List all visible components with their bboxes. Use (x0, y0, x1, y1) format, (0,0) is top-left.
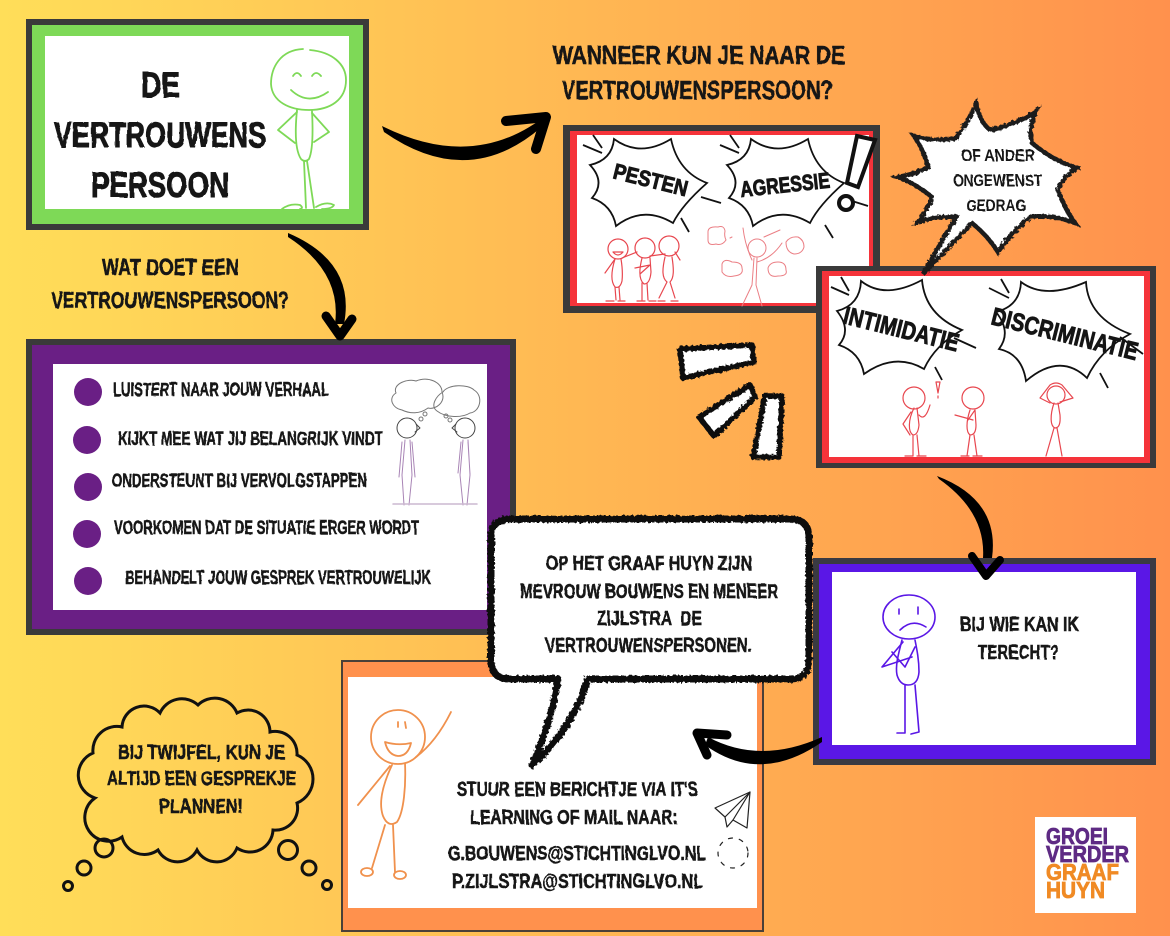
contact text: P.ZIJLSTRA@STICHTINGLVO.NL (452, 871, 703, 893)
logo: Groei Verder Graaf Huyn: GRAAF (1046, 859, 1119, 885)
burst: discriminatie (989, 279, 1143, 388)
icon: exclamation mark (839, 136, 875, 210)
title text: DE (141, 66, 180, 105)
list text: LUISTERT NAAR JOUW VERHAAL (113, 380, 329, 401)
panel: contact details (341, 660, 764, 932)
list text: KIJKT MEE WAT JIJ BELANGRIJK VINDT (118, 429, 383, 450)
list text: VOORKOMEN DAT DE SITUATIE ERGER WORDT (114, 518, 419, 539)
arrow: to who panel (937, 476, 1000, 576)
who text: BIJ WIE KAN IK (960, 614, 1079, 636)
bubble shape (491, 519, 809, 765)
bubble text: ZIJLSTRA DE (597, 608, 702, 630)
who text (960, 614, 1079, 664)
bubble text: VERTROUWENSPERSONEN. (545, 635, 752, 657)
icon: figures under pressure (903, 382, 1073, 456)
panel: who to contact (813, 558, 1156, 765)
burst shape (898, 104, 1077, 274)
speech bubble: who they are (491, 519, 809, 765)
cloud outline (78, 698, 313, 862)
heading: when: WANNEER KUN JE NAAR DE (553, 40, 845, 70)
cloud text (107, 742, 296, 818)
icon: paper plane (715, 792, 750, 868)
burst text: OF ANDER (961, 146, 1035, 165)
panel: bullying and aggression (563, 125, 880, 313)
list text (112, 380, 431, 589)
arrow: to task panel (288, 233, 352, 336)
panel: intimidation and discrimination (816, 266, 1156, 468)
burst: or other unwanted behaviour (898, 104, 1077, 274)
cloud text: PLANNEN! (159, 796, 243, 818)
bubble text: OP HET GRAAF HUYN ZIJN (546, 553, 752, 575)
heading: what does: VERTROUWENSPERSOON? (51, 287, 289, 313)
contact text (448, 779, 706, 893)
contact text: G.BOUWENS@STICHTINGLVO.NL (448, 843, 706, 865)
logo: Groei Verder Graaf Huyn: GROEI (1046, 823, 1108, 849)
burst: agressie: AGRESSIE (739, 168, 831, 202)
heading: when: VERTROUWENSPERSOON? (562, 75, 833, 105)
thought bubbles (64, 839, 332, 890)
logo: Groei Verder Graaf Huyn (1035, 817, 1136, 913)
icon: angry figure with clouds (708, 226, 804, 306)
arrow: title to when (382, 117, 546, 160)
list text: ONDERSTEUNT BIJ VERVOLGSTAPPEN (112, 471, 367, 492)
title text: VERTROUWENS (54, 116, 266, 155)
cloud text: ALTIJD EEN GESPREKJE (107, 768, 296, 790)
logo: Groei Verder Graaf Huyn: VERDER (1046, 841, 1129, 867)
heading: what does: WAT DOET EEN (102, 254, 239, 280)
icon: smiling green figure (271, 49, 346, 209)
icon: doubtful violet figure (882, 595, 935, 734)
thought cloud: when in doubt (64, 698, 332, 890)
heading: when (553, 40, 845, 105)
burst text: ONGEWENST (953, 171, 1042, 190)
bubble text: MEVROUW BOUWENS EN MENEER (520, 581, 778, 603)
list text: BEHANDELT JOUW GESPREK VERTROUWELIJK (125, 568, 431, 589)
contact text: STUUR EEN BERICHTJE VIA IT'S (457, 779, 698, 801)
contact text: LEARNING OF MAIL NAAR: (470, 807, 678, 829)
icon: three accent strokes (680, 345, 782, 457)
logo: Groei Verder Graaf Huyn: HUYN (1046, 877, 1105, 903)
burst: agressie (720, 135, 844, 238)
panel: title (26, 19, 369, 230)
burst text: GEDRAG (966, 196, 1026, 215)
burst: pesten (583, 135, 721, 232)
burst text (953, 146, 1042, 215)
icon: waving orange figure (358, 710, 451, 879)
panel: list of tasks (26, 339, 516, 635)
cloud text: BIJ TWIJFEL, KUN JE (118, 742, 285, 764)
bullets (73, 378, 102, 595)
heading: what does (51, 254, 289, 313)
icon: three figures (605, 236, 680, 301)
burst: discriminatie: DISCRIMINATIE (989, 303, 1141, 366)
title text (54, 66, 266, 205)
who text: TERECHT? (978, 642, 1059, 664)
bubble text (520, 553, 778, 657)
title text: PERSOON (91, 166, 229, 205)
burst: intimidatie (831, 277, 976, 380)
burst: intimidatie: INTIMIDATIE (841, 302, 962, 357)
icon: two figures talking (392, 379, 480, 505)
arrow: to contact panel (697, 733, 822, 764)
burst: pesten: PESTEN (611, 159, 691, 201)
